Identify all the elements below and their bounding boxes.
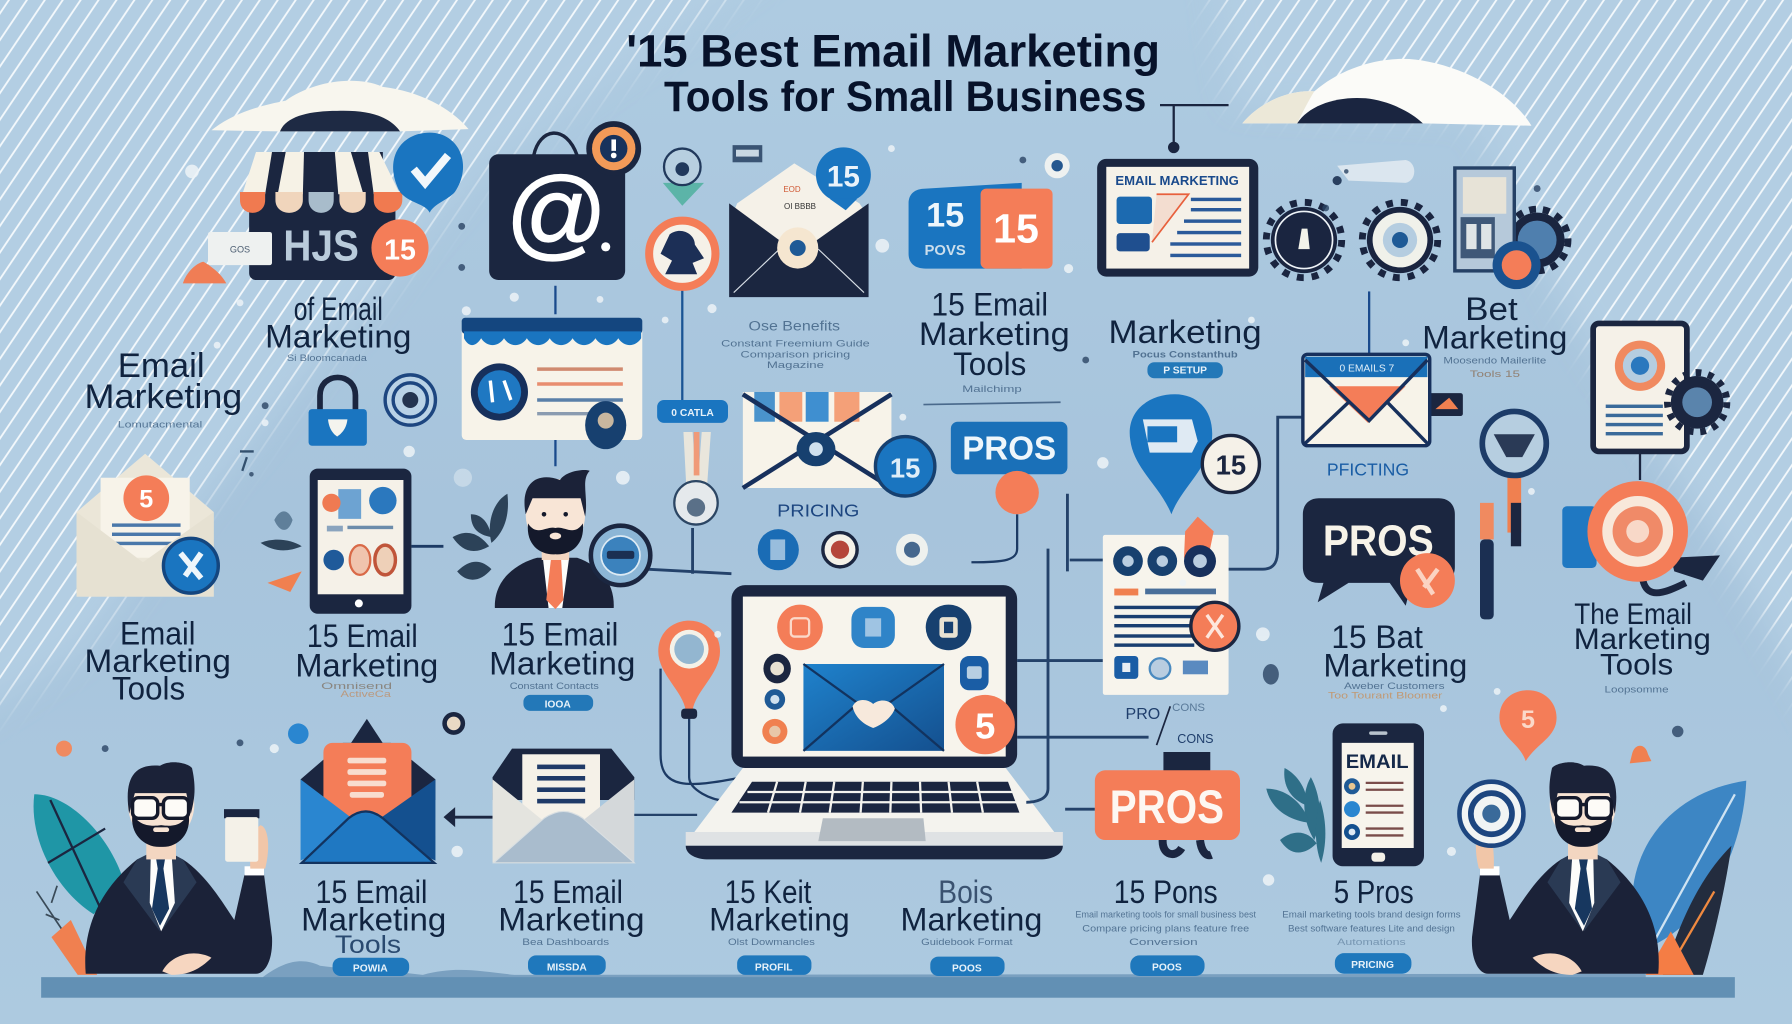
text: 15 email marketing tools bottom: Marketing: [301, 901, 446, 937]
icon: cup: [224, 809, 259, 862]
text: email marketing tools left row: [85, 616, 231, 706]
icon: gears: [1266, 202, 1438, 278]
icon: blue pin with 15: [1130, 394, 1259, 514]
text: pricing centre: PRICING: [777, 501, 859, 521]
decorative confetti: [185, 145, 1535, 886]
panel: email marketing tablet: EMAIL MARKETING: [1115, 174, 1239, 188]
icon: orange 15 badge: [371, 219, 429, 277]
text: 15 pons: Conversion: [1129, 937, 1198, 947]
text: of email marketing: Marketing: [265, 318, 411, 354]
text: the email marketing tools: Marketing: [1574, 623, 1711, 656]
icon: plants left of tablet: [240, 451, 302, 592]
panel: email marketing tablet: [1097, 159, 1258, 277]
text: email marketing tools left row: Tools: [112, 670, 185, 706]
text: 15 email marketing tools top: Marketing: [919, 316, 1070, 352]
text: 15 keit marketing: Marketing: [709, 901, 850, 937]
icon: orange location pin: [658, 621, 743, 800]
text: 15 keit marketing: 15 Keit: [725, 874, 812, 910]
text: bois marketing: Guidebook Format: [921, 937, 1013, 947]
icon: small orange target dot: [56, 741, 72, 757]
text: 15 email marketing col 2: [295, 618, 438, 699]
icon: screen badges: 5: [975, 705, 995, 746]
text: 15 email marketing col 2: Marketing: [295, 648, 438, 684]
icon: mail envelope centre: [743, 392, 935, 496]
text: 15 email marketing tools top: Tools: [953, 346, 1026, 382]
icon: small teal pin: [663, 149, 704, 206]
text: 15 bat marketing: Marketing: [1323, 648, 1467, 684]
icon: black envelope: EOD: [783, 185, 801, 194]
icon: small badge: [1045, 153, 1070, 178]
icon: tablet with tiles: [310, 469, 443, 614]
text: the email marketing tools: Tools: [1600, 648, 1673, 681]
text: 5 pros: PRICING: [1351, 960, 1394, 971]
panel: laptop: [686, 585, 1063, 859]
text: 5 pros: Automations: [1337, 937, 1406, 947]
text: 15 email marketing tools top: Mailchimp: [962, 384, 1022, 394]
text: 15 email marketing bottom 2: Bea Dashboards: [522, 937, 610, 947]
icon: phone with email list: [1333, 723, 1424, 866]
icon: black envelope: OI BBBB: [784, 202, 816, 211]
text: 5 pros: Best software features Lite and design: [1288, 923, 1455, 933]
icon: storefront: [183, 133, 463, 283]
text: pro cons: [1126, 702, 1214, 746]
text: 15 email marketing tools bottom: Tools: [335, 931, 401, 959]
text: bois marketing: Bois: [938, 874, 993, 910]
text: the email marketing tools: Loopsomme: [1605, 685, 1669, 695]
text: the email marketing tools: [1574, 598, 1711, 695]
text: 15 email marketing col 2: Omnisend: [321, 681, 392, 691]
icon: orange speech bubble: 5: [1521, 706, 1535, 734]
title: '15 Best Email Marketing: [626, 25, 1160, 76]
icons: pricing circles: [758, 529, 928, 570]
icon: black envelope: 15: [827, 160, 860, 193]
text: bet marketing: Tools 15: [1470, 369, 1520, 379]
text: email marketing left: Marketing: [85, 378, 242, 416]
icon: envelope on screen: [803, 664, 944, 751]
text: 15 bat marketing: [1323, 619, 1467, 700]
text: 15 email marketing tools bottom: [301, 874, 446, 976]
text: email marketing tools left row: Marketing: [85, 643, 231, 679]
icon: target on stick: [1459, 782, 1523, 846]
icon: storefront: GOS: [230, 245, 250, 255]
icon: small device: [733, 145, 762, 162]
text: of email marketing: of Email: [294, 291, 383, 327]
text: bet marketing: Marketing: [1422, 320, 1567, 356]
icon: left cloud: [211, 81, 469, 131]
panel: checklist card: [1103, 517, 1239, 695]
button: PROS orange: PROS: [1110, 781, 1224, 833]
text: 15 email marketing col 2: 15 Email: [307, 618, 418, 654]
text: marketing top: Marketing: [1109, 314, 1262, 350]
figure: left man with cup: [34, 762, 272, 975]
text: bois marketing: [901, 874, 1042, 976]
text: email marketing left: Lomutacmental: [118, 419, 202, 429]
text: 15 bat marketing: Aweber Customers: [1344, 681, 1445, 691]
icon: right cloud: [1160, 59, 1531, 153]
text: 15 email marketing bottom 2: [498, 874, 645, 975]
icon: small ring: [445, 714, 463, 733]
icon: right envelope: 0 EMAILS 7: [1339, 363, 1395, 374]
pill: connector label: 0 CATLA: [671, 408, 714, 419]
icon: small blue dot: [288, 723, 309, 744]
icon: target ring: [385, 375, 435, 425]
text: marketing top: P SETUP: [1163, 366, 1207, 377]
figure: right man with target: [1459, 762, 1746, 975]
text: bois marketing: POOS: [952, 963, 982, 974]
text: bet marketing: [1422, 291, 1567, 379]
icon: envelope orange paper: [301, 719, 435, 863]
pill: connector label: [657, 400, 728, 423]
icon: small orange badge: [1630, 746, 1651, 763]
text: pricing right: PFICTING: [1327, 459, 1409, 479]
button: PROS orange: [1095, 752, 1240, 855]
icon: pencil: [1480, 503, 1494, 619]
icon: right envelope: [1303, 291, 1463, 446]
text: 15 pons: Compare pricing plans feature free: [1082, 923, 1249, 933]
icon: blue pin with 15: 15: [1216, 449, 1246, 480]
text: pro cons: CONS: [1172, 702, 1205, 714]
text: of email marketing: [265, 291, 411, 363]
text: 15 bat marketing: Too Tourant Bloomer: [1328, 690, 1442, 700]
icon: check pin: [393, 133, 463, 213]
text: 15 email marketing col 3: [489, 617, 635, 711]
icon: search magnifier: [1482, 411, 1546, 546]
text: pro cons: CONS: [1177, 732, 1214, 746]
callout: PROS speech bubble: [1303, 498, 1455, 608]
text: 15 pons: POOS: [1152, 962, 1182, 973]
icon: envelope with document: [493, 749, 697, 863]
icon: orange ring badge with connector: [649, 221, 715, 402]
icon: arrow between envelopes: [446, 810, 493, 824]
icon: mail envelope centre: 15: [890, 453, 920, 484]
text: 15 keit marketing: [709, 874, 850, 975]
icon: 15 cards: POVS: [925, 243, 966, 259]
button: PROS blue: PROS: [962, 430, 1056, 467]
text: email marketing left: [85, 347, 242, 429]
text: 15 bat marketing: 15 Bat: [1331, 619, 1423, 655]
connector lines: right of laptop: [1017, 417, 1303, 809]
text: 15 email marketing bottom 2: Marketing: [498, 901, 645, 937]
icon: padlock: [309, 377, 367, 446]
text: email marketing left: Email: [118, 347, 205, 385]
panel: awning card: [462, 286, 642, 466]
icon: magnifier with connector: [591, 526, 731, 585]
text: blurred description top middle: [721, 318, 870, 370]
title: Tools for Small Business: [664, 73, 1146, 120]
icon: 15 cards: [909, 183, 1053, 269]
icon: 15 cards: 15: [926, 196, 964, 234]
button: PROS blue: [951, 422, 1067, 474]
icon: black envelope: [729, 147, 871, 297]
text: 15 email marketing col 3: IOOA: [545, 699, 571, 710]
text: marketing top: Pocus Constanthub: [1133, 350, 1238, 360]
text: 15 keit marketing: Olst Dowmancles: [728, 937, 815, 947]
title: [626, 25, 1160, 120]
text: the email marketing tools: The Email: [1574, 598, 1692, 631]
text: 15 email marketing tools top: 15 Email: [931, 286, 1048, 322]
icon: plant by phone: [1266, 768, 1325, 863]
icon: screen badges: [762, 605, 1015, 754]
text: pro cons: PRO: [1126, 706, 1160, 723]
text: 15 pons: Email marketing tools for small business best: [1075, 910, 1256, 920]
icon: orange balloon connector: [971, 471, 1039, 562]
text: marketing top: [1109, 314, 1262, 378]
text: 15 email marketing col 3: 15 Email: [502, 617, 618, 653]
striped corner background: [0, 0, 1792, 719]
text: 5 pros: 5 Pros: [1334, 874, 1414, 910]
text: 5 pros: Email marketing tools brand design forms: [1282, 910, 1461, 920]
text: 15 email marketing tools bottom: 15 Email: [315, 874, 427, 910]
icon: envelope with letter left: 5: [139, 485, 153, 513]
text: blurred description top middle: Ose Benefits: [749, 318, 840, 333]
text: 15 email marketing bottom 2: 15 Email: [513, 874, 623, 910]
text: blurred description top middle: Magazine: [767, 360, 824, 370]
icon: small pill shape: [1333, 160, 1414, 185]
icon: machine with gear: [1455, 168, 1568, 289]
callout: PROS speech bubble: PROS: [1323, 517, 1434, 565]
panel: right report card: [1593, 323, 1727, 480]
text: email marketing tools left row: Email: [120, 616, 195, 652]
icon: phone with email list: EMAIL: [1346, 751, 1409, 773]
icon: blue leaf: [1632, 781, 1746, 975]
icon: plant by man: [453, 494, 508, 580]
text: 5 pros: [1282, 874, 1461, 974]
icon: storefront: HJS: [283, 223, 359, 271]
icon: teal leaf: [34, 794, 123, 975]
text: 15 pons: 15 Pons: [1114, 874, 1218, 910]
icon: orange 15 badge: 15: [384, 234, 416, 266]
icon: 15 cards: 15: [993, 205, 1039, 251]
icon: wrench: [674, 432, 718, 525]
icon: envelope with letter left: [77, 454, 218, 597]
text: bet marketing: Bet: [1465, 291, 1518, 327]
text: 15 keit marketing: PROFIL: [755, 962, 793, 973]
text: 15 email marketing col 3: Constant Contacts: [510, 681, 599, 691]
icon: orange target: [1562, 481, 1720, 593]
text: blurred description top middle: Comparison pricing: [741, 350, 850, 360]
figure: bearded man: [495, 470, 614, 609]
text: of email marketing: Si Bloomcanada: [287, 353, 368, 363]
text: 15 email marketing tools bottom: POWIA: [353, 963, 388, 974]
icon: orange speech bubble: [1499, 690, 1557, 761]
text: bois marketing: Marketing: [901, 901, 1042, 937]
text: bet marketing: Moosendo Mailerlite: [1443, 355, 1546, 365]
text: 15 email marketing col 3: Marketing: [489, 645, 635, 681]
bottom platform: [41, 961, 1735, 998]
icon: at-sign bag: @: [506, 157, 608, 269]
icon: at-sign bag: [489, 121, 641, 280]
text: 15 email marketing bottom 2: MISSDA: [547, 962, 587, 973]
text: 15 email marketing col 2: ActiveCa: [341, 689, 392, 699]
text: 15 email marketing tools top: [919, 286, 1070, 405]
text: blurred description top middle: Constant Freemium Guide: [721, 338, 870, 348]
text: 15 pons: [1075, 874, 1256, 976]
